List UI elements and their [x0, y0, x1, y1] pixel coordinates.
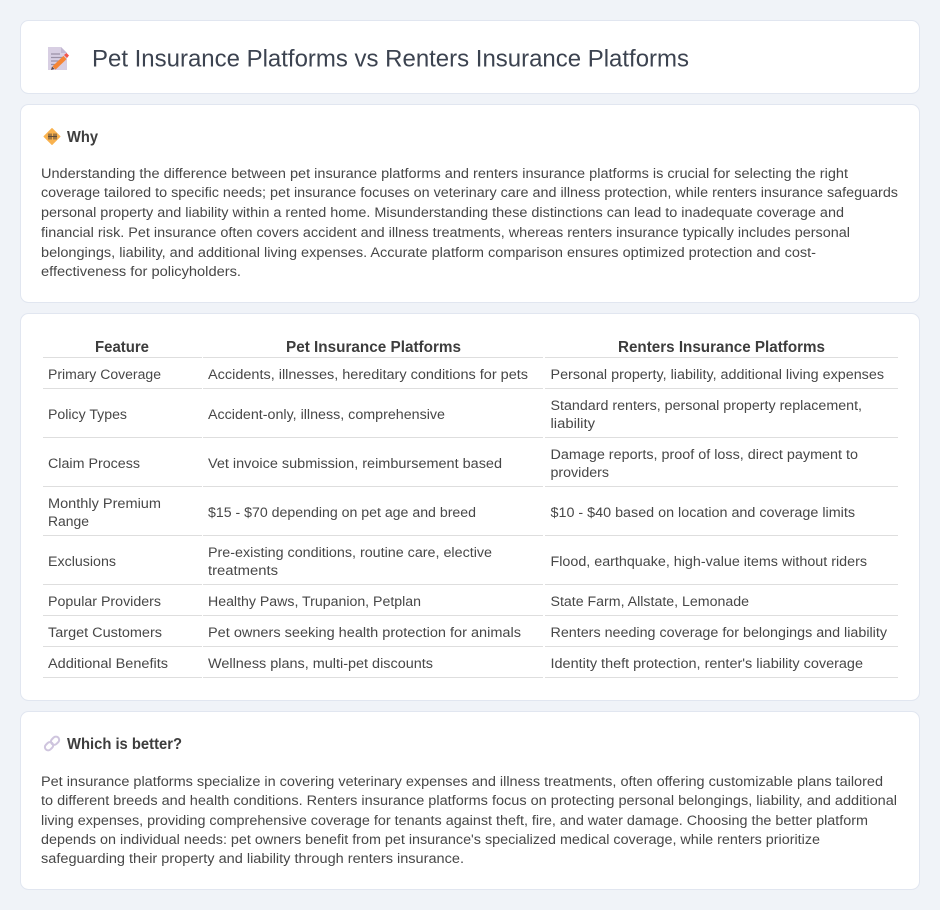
text block: which is better paragraph [41, 774, 897, 867]
icon: warning diamond [44, 128, 60, 144]
text block: why paragraph: effectiveness for policyholders. [41, 264, 241, 280]
row: primary coverage: Primary Coverage [48, 367, 161, 383]
text block: which is better paragraph: living expenses, providing comprehensive coverage for tenants against theft, fire, and water damage. Choosing the better platform [41, 813, 868, 829]
row: popular providers: Healthy Paws, Trupanion, Petplan [208, 594, 421, 610]
text block: why paragraph [41, 166, 898, 280]
text block: why paragraph: belongings, liability, and additional living expenses. Accurate platform comparison ensures optimized protection and cost- [41, 245, 816, 261]
row: exclusions: Pre-existing conditions, routine care, elective [208, 545, 492, 561]
row: target customers: Pet owners seeking health protection for animals [208, 625, 521, 641]
row: exclusions: treatments [208, 563, 278, 579]
text block: which is better paragraph: depends on individual needs: pet owners benefit from pet insurance's specialized medical coverage, while renters prioritize [41, 832, 820, 848]
row: policy types: Policy Types [48, 407, 127, 423]
title text: Pet Insurance Platforms vs Renters Insurance Platforms [92, 46, 689, 72]
row: exclusions: Flood, earthquake, high-value items without riders [550, 554, 867, 570]
row: policy types: Standard renters, personal property replacement, [550, 398, 862, 414]
row: claim process: Damage reports, proof of loss, direct payment to [550, 447, 858, 463]
row: policy types: Accident-only, illness, comprehensive [208, 407, 445, 423]
panel: comparison table [20, 314, 920, 700]
row: claim process: Claim Process [48, 456, 140, 472]
panel: why [20, 104, 920, 302]
row: monthly premium range: $15 - $70 depending on pet age and breed [208, 505, 476, 521]
icon: memo with pencil [48, 47, 69, 70]
row: monthly premium range: Range [48, 514, 89, 530]
text block: which is better paragraph: to different breeds and health conditions. Renters insurance platforms focus on protecting personal belongings, liability, and additional [41, 793, 897, 809]
table header row: Feature [95, 339, 149, 356]
text block: why paragraph: Understanding the difference between pet insurance platforms and renters insurance platforms is crucial for selecting the right [41, 166, 848, 182]
panel: title [20, 20, 920, 94]
row: claim process: Vet invoice submission, reimbursement based [208, 456, 502, 472]
text block: why paragraph: personal property and liability within a rented home. Misunderstanding these distinctions can lead to inadequate coverage and [41, 205, 844, 221]
row: popular providers: State Farm, Allstate, Lemonade [550, 594, 749, 610]
row: claim process: providers [550, 465, 609, 481]
row: popular providers: Popular Providers [48, 594, 161, 610]
row: additional benefits: Additional Benefits [48, 656, 168, 672]
icon: link [44, 735, 61, 752]
row: exclusions [48, 545, 867, 579]
row: additional benefits: Identity theft protection, renter's liability coverage [550, 656, 863, 672]
heading: why: Why [67, 129, 98, 146]
row: policy types: liability [550, 416, 596, 432]
row: exclusions: Exclusions [48, 554, 116, 570]
row: primary coverage: Accidents, illnesses, hereditary conditions for pets [208, 367, 528, 383]
table header row [95, 339, 825, 356]
row: monthly premium range: $10 - $40 based on location and coverage limits [550, 505, 855, 521]
row: additional benefits [48, 656, 863, 672]
table header row: Renters Insurance Platforms [618, 339, 825, 356]
row: popular providers [48, 594, 749, 610]
row: policy types [48, 398, 862, 432]
text block: why paragraph: coverage tailored to specific needs; pet insurance focuses on veterinary care and illness protection, while renters insurance safeguards [41, 185, 898, 201]
row: target customers: Target Customers [48, 625, 162, 641]
row: claim process [48, 447, 858, 481]
row: monthly premium range: Monthly Premium [48, 496, 161, 512]
row: target customers [48, 625, 888, 641]
row: monthly premium range [48, 496, 855, 530]
text block: which is better paragraph: safeguarding their property and liability through renters insurance. [41, 851, 464, 867]
row: target customers: Renters needing coverage for belongings and liability [550, 625, 888, 641]
text block: why paragraph: financial risk. Pet insurance often covers accident and illness treatments, whereas renters insurance typically includes personal [41, 225, 850, 241]
panel: which is better [20, 712, 920, 890]
row: additional benefits: Wellness plans, multi-pet discounts [208, 656, 433, 672]
text block: which is better paragraph: Pet insurance platforms specialize in covering veterinary expenses and illness treatments, often offering customizable plans tailored [41, 774, 883, 790]
row: primary coverage: Personal property, liability, additional living expenses [550, 367, 884, 383]
row: primary coverage [48, 367, 884, 383]
table header row: Pet Insurance Platforms [286, 339, 461, 356]
heading: which is better: Which is better? [67, 736, 182, 753]
